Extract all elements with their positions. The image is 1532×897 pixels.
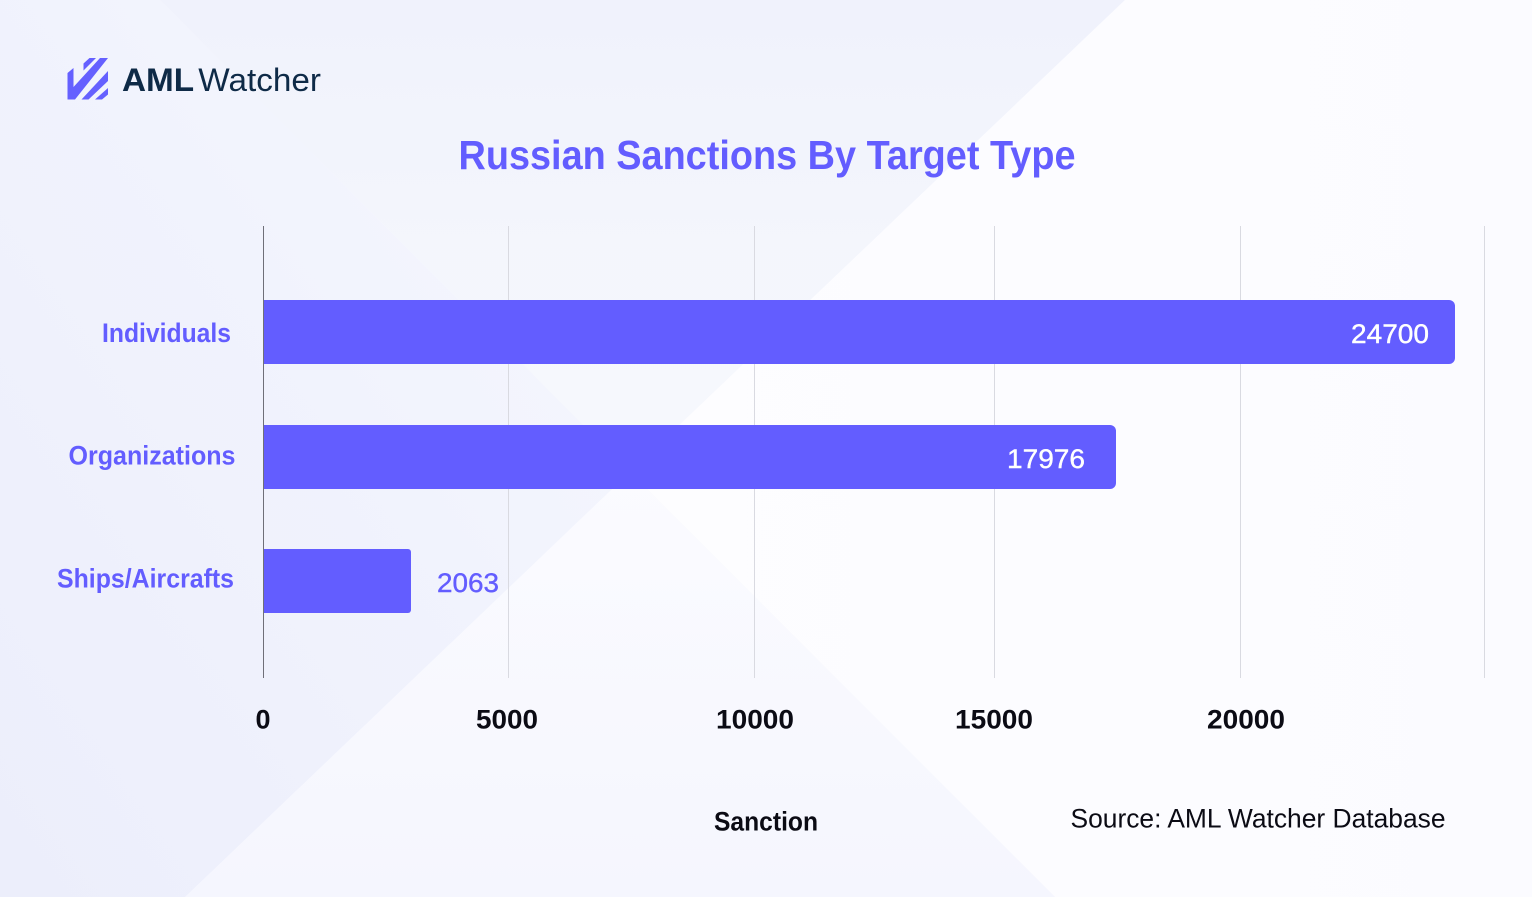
bar chart <box>57 226 1484 836</box>
x-axis tick labels: 20000 <box>1207 704 1285 734</box>
grid lines <box>508 226 1484 678</box>
bar: Organizations: 17976 <box>1007 444 1085 474</box>
title: Russian Sanctions By Target Type <box>458 132 1076 178</box>
x-axis tick labels: 15000 <box>955 704 1033 734</box>
source note: Source: AML Watcher Database <box>1070 804 1446 834</box>
bar: Ships/Aircrafts <box>263 549 499 613</box>
x-axis title: Sanction <box>714 806 818 836</box>
x-axis tick labels: 5000 <box>476 704 538 734</box>
bar: Organizations <box>263 425 1116 489</box>
bar: Individuals: 24700 <box>1351 319 1429 349</box>
bar: Individuals <box>263 300 1455 364</box>
logo: AML Watcher <box>68 58 321 100</box>
icon: striped logo mark <box>68 58 108 100</box>
bar: Ships/Aircrafts: 2063 <box>437 568 499 598</box>
category labels <box>57 318 236 594</box>
category labels: Ships/Aircrafts <box>57 564 234 594</box>
axis line <box>262 226 264 678</box>
x-axis tick labels <box>255 704 1285 734</box>
category labels: Organizations <box>68 440 236 470</box>
x-axis tick labels: 0 <box>255 704 271 734</box>
x-axis tick labels: 10000 <box>716 704 794 734</box>
logo wordmark: AMLWatcher <box>122 62 321 98</box>
category labels: Individuals <box>102 318 231 348</box>
